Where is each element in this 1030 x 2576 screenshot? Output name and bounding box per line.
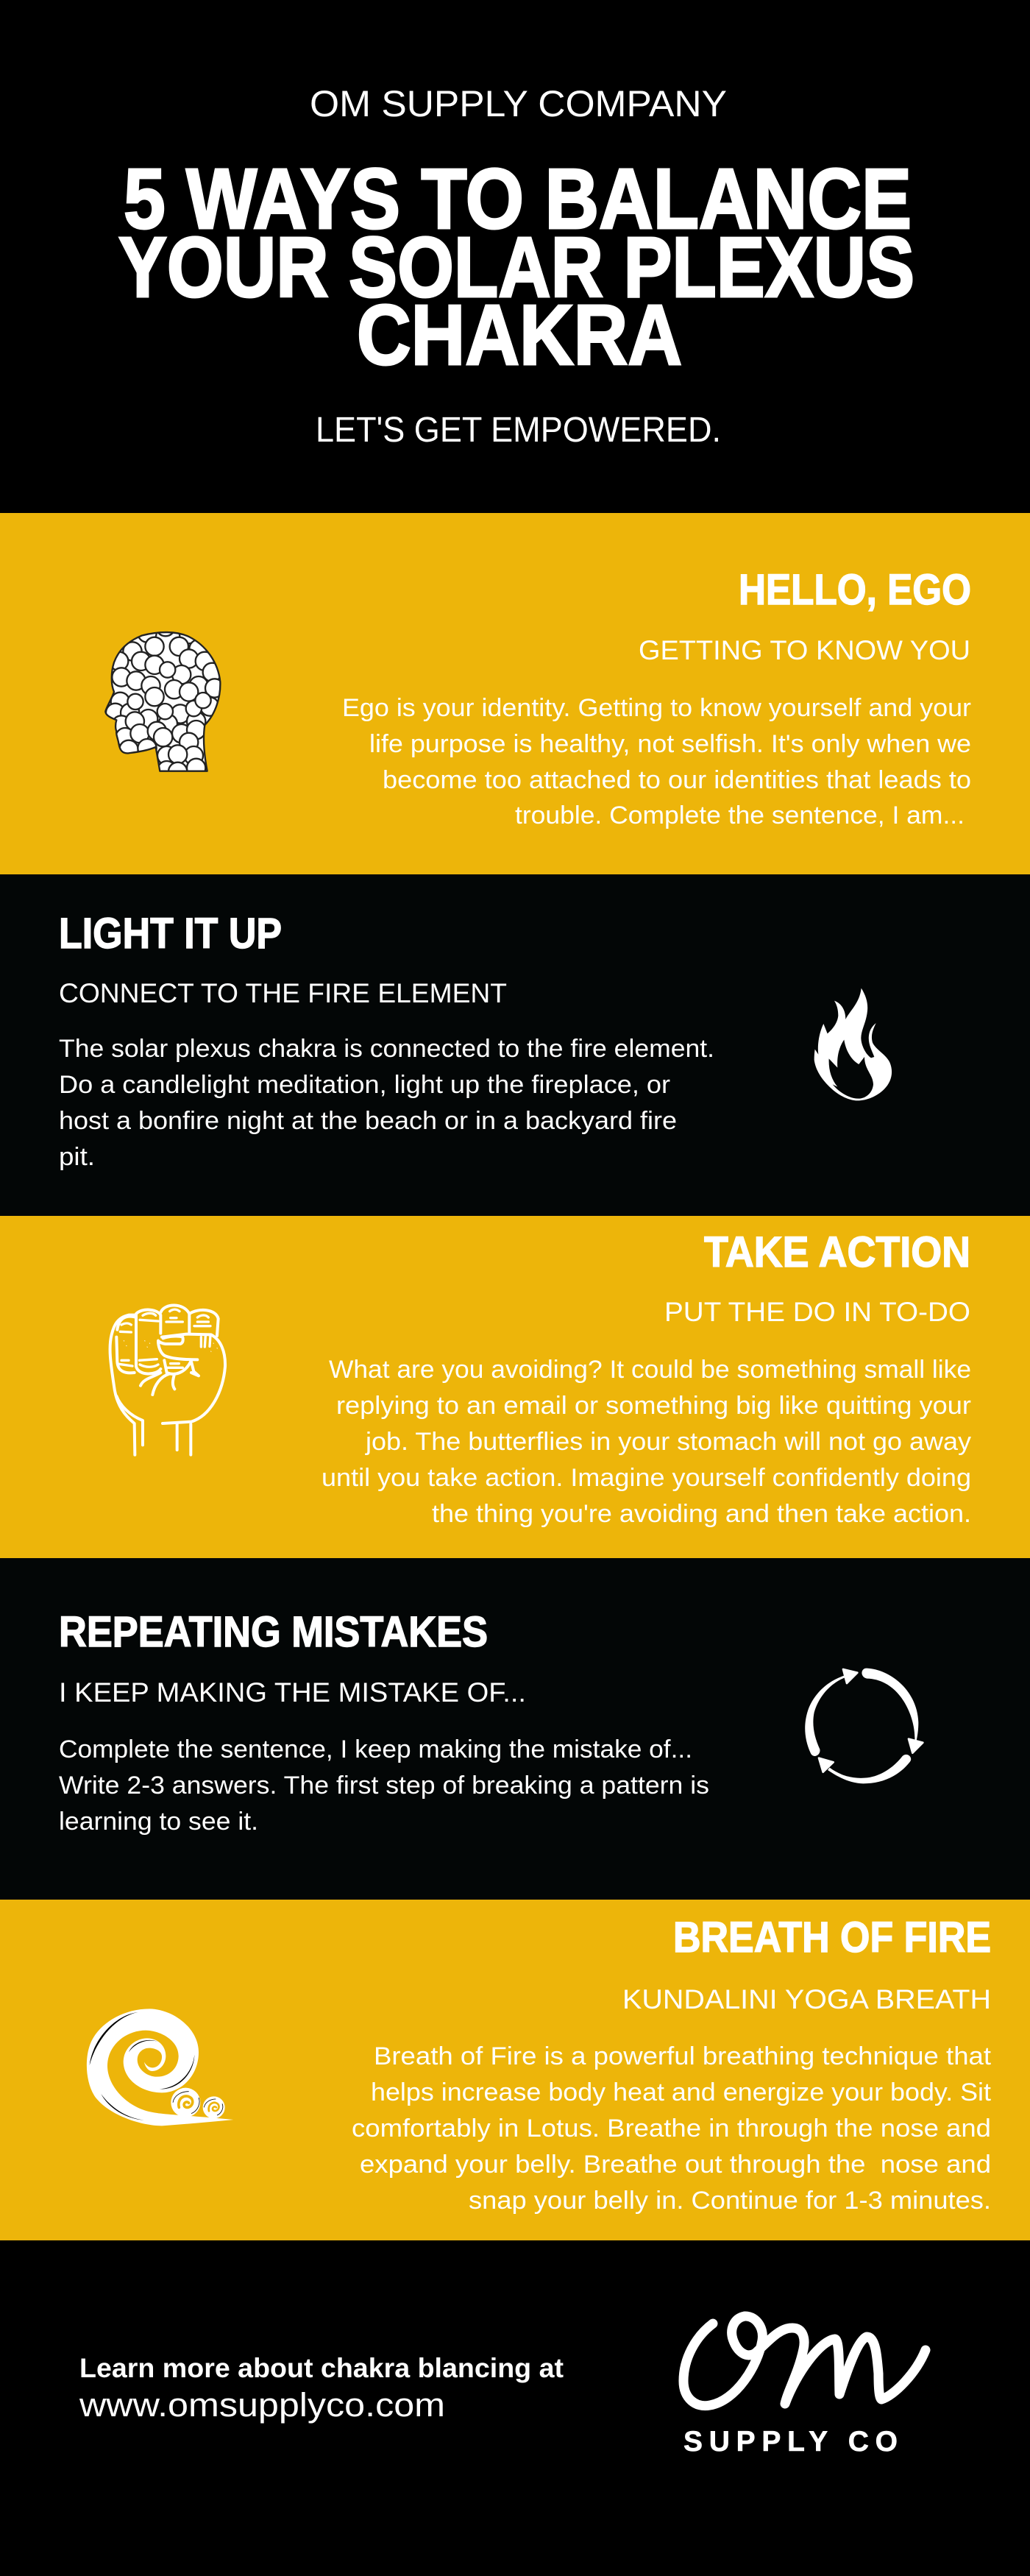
body text: Breath of Fire is a powerful breathing technique that bbox=[374, 2042, 992, 2070]
logo mark: script Om bbox=[683, 2316, 926, 2406]
body text: expand your belly. Breathe out through the nose and bbox=[360, 2151, 991, 2179]
icon: wind swirl bbox=[87, 2009, 233, 2126]
body text: host a bonfire night at the beach or in a backyard fire bbox=[59, 1107, 677, 1135]
body text: pit. bbox=[59, 1143, 95, 1171]
body text: comfortably in Lotus. Breathe in through the nose and bbox=[352, 2115, 991, 2142]
panel: hello ego bbox=[0, 513, 1030, 874]
icon: raised fist bbox=[110, 1306, 225, 1455]
body text: Do a candlelight meditation, light up the fireplace, or bbox=[59, 1071, 670, 1099]
body text: The solar plexus chakra is connected to the fire element. bbox=[59, 1035, 714, 1063]
body text: become too attached to our identities that leads to bbox=[383, 766, 971, 794]
logo wordmark: SUPPLY CO bbox=[683, 2426, 898, 2458]
call to action: Learn more about chakra blancing at bbox=[79, 2353, 564, 2383]
logo bbox=[683, 2316, 926, 2458]
panel: breath of fire bbox=[0, 1900, 1030, 2240]
body text: Write 2-3 answers. The first step of breaking a pattern is bbox=[59, 1772, 709, 1800]
panel: header bbox=[0, 0, 1030, 513]
icon: head made of circles bbox=[104, 631, 221, 772]
subheading: KUNDALINI YOGA BREATH bbox=[622, 1984, 991, 2014]
body text bbox=[59, 1035, 714, 1171]
panel: repeating mistakes bbox=[0, 1558, 1030, 1900]
website url: www.omsupplyco.com bbox=[79, 2386, 445, 2424]
heading: LIGHT IT UP bbox=[59, 910, 282, 958]
body text: learning to see it. bbox=[59, 1808, 258, 1836]
subheading: PUT THE DO IN TO-DO bbox=[664, 1297, 970, 1327]
body text: What are you avoiding? It could be something small like bbox=[329, 1356, 971, 1384]
body text bbox=[322, 1356, 971, 1528]
title bbox=[118, 151, 914, 383]
body text: Complete the sentence, I keep making the mistake of... bbox=[59, 1735, 692, 1763]
heading: HELLO, EGO bbox=[739, 566, 971, 614]
icon: cycle arrows bbox=[805, 1669, 923, 1783]
title: 5 WAYS TO BALANCE bbox=[124, 151, 912, 247]
title: YOUR SOLAR PLEXUS bbox=[118, 219, 914, 315]
tagline: LET'S GET EMPOWERED. bbox=[316, 411, 721, 450]
heading: REPEATING MISTAKES bbox=[59, 1608, 488, 1656]
subheading: I KEEP MAKING THE MISTAKE OF... bbox=[59, 1677, 526, 1708]
body text: life purpose is healthy, not selfish. It's only when we bbox=[369, 730, 971, 758]
body text: job. The butterflies in your stomach will not go away bbox=[365, 1428, 971, 1456]
brand line: OM SUPPLY COMPANY bbox=[310, 83, 727, 124]
subheading: GETTING TO KNOW YOU bbox=[639, 635, 970, 665]
panel: take action bbox=[0, 1216, 1030, 1558]
body text: Ego is your identity. Getting to know yourself and your bbox=[342, 694, 971, 722]
body text: until you take action. Imagine yourself confidently doing bbox=[322, 1464, 971, 1492]
body text: replying to an email or something big like quitting your bbox=[336, 1392, 971, 1420]
body text bbox=[342, 694, 971, 829]
icon: flame bbox=[814, 988, 892, 1100]
title: CHAKRA bbox=[357, 287, 682, 383]
body text: trouble. Complete the sentence, I am... bbox=[515, 802, 965, 829]
panel: footer bbox=[0, 2240, 1030, 2576]
body text: helps increase body heat and energize your body. Sit bbox=[371, 2078, 992, 2106]
body text bbox=[352, 2042, 992, 2215]
body text bbox=[59, 1735, 709, 1836]
heading: BREATH OF FIRE bbox=[673, 1914, 991, 1961]
body text: the thing you're avoiding and then take action. bbox=[432, 1500, 971, 1528]
subheading: CONNECT TO THE FIRE ELEMENT bbox=[59, 978, 507, 1008]
panel: light it up bbox=[0, 874, 1030, 1216]
heading: TAKE ACTION bbox=[704, 1228, 970, 1276]
body text: snap your belly in. Continue for 1-3 minutes. bbox=[469, 2187, 991, 2215]
